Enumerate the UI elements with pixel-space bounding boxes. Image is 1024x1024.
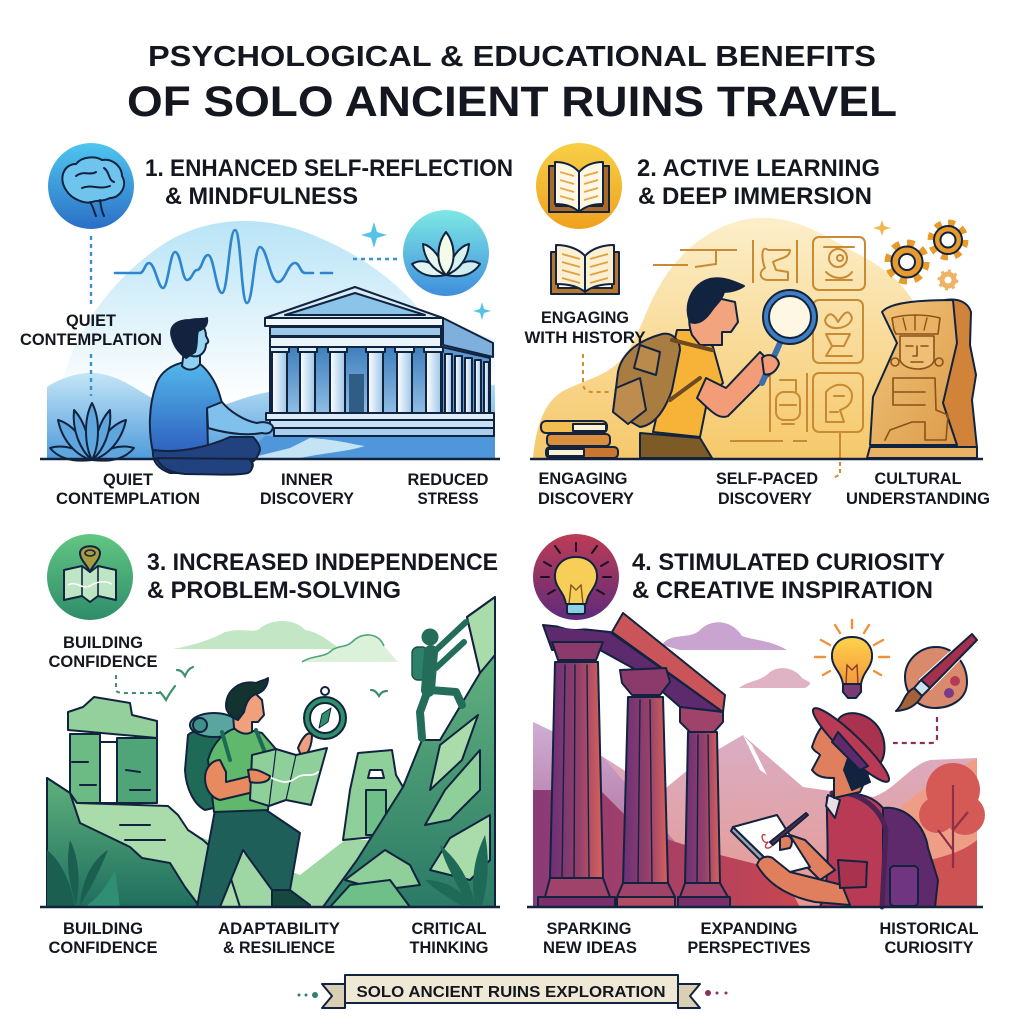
side label: building confidence: CONFIDENCE — [48, 653, 158, 671]
clouds — [173, 621, 398, 662]
bottom labels 3 — [48, 920, 488, 957]
bottom labels 4: SPARKING — [546, 920, 632, 938]
heading 3 — [147, 549, 498, 604]
heading 2 — [637, 155, 880, 210]
section 3 icon: map — [47, 534, 133, 620]
heading 4 — [632, 549, 945, 604]
side label: quiet contemplation: CONTEMPLATION — [20, 331, 162, 349]
bottom labels 3: & RESILIENCE — [223, 939, 335, 957]
bottom labels 2: SELF-PACED — [716, 470, 818, 488]
dashed connector — [116, 675, 160, 693]
bottom labels 2: UNDERSTANDING — [846, 490, 990, 508]
bottom labels 2: DISCOVERY — [718, 490, 812, 508]
section 4 icon: light bulb — [524, 525, 628, 629]
heading 4: 4. STIMULATED CURIOSITY — [632, 549, 945, 576]
bottom labels 3: THINKING — [410, 939, 488, 957]
stone arch ruin — [68, 697, 157, 803]
carved stele — [867, 300, 977, 458]
heading 2: 2. ACTIVE LEARNING — [637, 155, 880, 182]
heading 4: & CREATIVE INSPIRATION — [632, 577, 933, 604]
side label: building confidence — [48, 634, 158, 671]
bottom labels 1: STRESS — [418, 490, 478, 508]
side label: engaging with history: ENGAGING — [541, 309, 629, 327]
heading 3: & PROBLEM-SOLVING — [147, 577, 401, 604]
bottom labels 2: DISCOVERY — [538, 490, 634, 508]
sketching traveller — [731, 702, 938, 907]
light bulb idea icon — [815, 620, 889, 698]
bottom labels 3: BUILDING — [63, 920, 143, 938]
bottom labels 1: REDUCED — [408, 471, 489, 489]
bottom labels 1 — [56, 471, 489, 508]
sparkles — [361, 222, 491, 320]
baseline 3 — [40, 906, 500, 908]
lotus plant — [50, 403, 134, 461]
bottom labels 4: CURIOSITY — [884, 939, 974, 957]
bottom labels 2: ENGAGING — [538, 470, 628, 488]
side label: quiet contemplation: QUIET — [66, 312, 116, 330]
dashed tick — [834, 462, 840, 478]
bottom labels 4: NEW IDEAS — [543, 939, 637, 957]
explorer with magnifying glass — [613, 278, 817, 458]
dashed connector — [893, 717, 937, 743]
bottom labels 2 — [538, 470, 990, 508]
heading 1 — [145, 155, 513, 210]
footer dots right — [705, 990, 728, 996]
panel 2: active learning — [524, 143, 990, 508]
tree — [919, 763, 985, 868]
side label: engaging with history: WITH HISTORY — [524, 329, 646, 347]
climber silhouette — [412, 622, 466, 738]
right foliage — [425, 835, 488, 905]
scene blob background — [533, 218, 950, 458]
panel 4: curiosity — [524, 525, 985, 957]
clouds — [662, 622, 810, 688]
left hill with steps — [47, 778, 240, 907]
title: OF SOLO ANCIENT RUINS TRAVEL — [127, 78, 897, 126]
heading 3: 3. INCREASED INDEPENDENCE — [147, 549, 498, 576]
baseline 4 — [527, 906, 983, 908]
section 2 icon: book — [536, 143, 622, 229]
left foliage — [47, 840, 120, 907]
bottom labels 1: QUIET — [103, 471, 153, 489]
side label: building confidence: BUILDING — [63, 634, 143, 652]
section 1 icon: brain — [48, 143, 134, 229]
heading 2: & DEEP IMMERSION — [638, 183, 872, 210]
bottom labels 2: CULTURAL — [874, 470, 962, 488]
bottom labels 4: HISTORICAL — [880, 920, 978, 938]
bottom labels 3: CRITICAL — [412, 920, 486, 938]
bottom labels 4 — [543, 920, 978, 957]
carved wall lines — [653, 240, 840, 459]
title — [127, 41, 897, 126]
scene background: sky dome and hills — [47, 221, 495, 459]
footer ribbon — [322, 975, 700, 1008]
brainwave line — [115, 230, 332, 303]
person legs over baseline — [157, 458, 252, 475]
bottom labels 1: DISCOVERY — [260, 490, 354, 508]
heading 1: 1. ENHANCED SELF-REFLECTION — [145, 155, 513, 182]
footer dots left — [298, 992, 318, 998]
bottom labels 3: ADAPTABILITY — [218, 920, 340, 938]
glyph panels — [761, 237, 865, 432]
distant ruin — [343, 750, 403, 840]
footer ribbon: SOLO ANCIENT RUINS EXPLORATION — [356, 984, 666, 1001]
birds — [160, 667, 387, 700]
title: PSYCHOLOGICAL & EDUCATIONAL BENEFITS — [148, 41, 876, 73]
climbing rock cliff — [323, 597, 495, 907]
gears — [873, 220, 965, 289]
palette and paintbrush — [896, 634, 977, 711]
panel 3: independence — [40, 534, 500, 957]
dashed connector lines — [91, 236, 398, 396]
temple — [265, 287, 494, 436]
meditating person — [150, 318, 273, 473]
bottom labels 3: CONFIDENCE — [48, 939, 158, 957]
bottom labels 4: PERSPECTIVES — [688, 939, 810, 957]
bottom labels 1: CONTEMPLATION — [56, 490, 200, 508]
background hills — [533, 722, 977, 907]
lotus circle icon — [403, 210, 489, 296]
baseline 1 — [40, 458, 500, 460]
side label: quiet contemplation — [20, 312, 162, 349]
side label: engaging with history — [524, 309, 646, 347]
panel 1: self-reflection — [20, 143, 513, 508]
bottom labels 4: EXPANDING — [700, 920, 798, 938]
mid ground — [180, 835, 400, 907]
baseline 2 — [530, 458, 983, 460]
ruined columns and roof — [538, 613, 730, 907]
hiker with map and compass — [185, 678, 346, 907]
book stack — [541, 421, 618, 458]
dashed connector — [583, 354, 612, 392]
heading 1: & MINDFULNESS — [165, 183, 358, 210]
bottom labels 1: INNER — [281, 471, 333, 489]
open book icon — [551, 245, 619, 294]
